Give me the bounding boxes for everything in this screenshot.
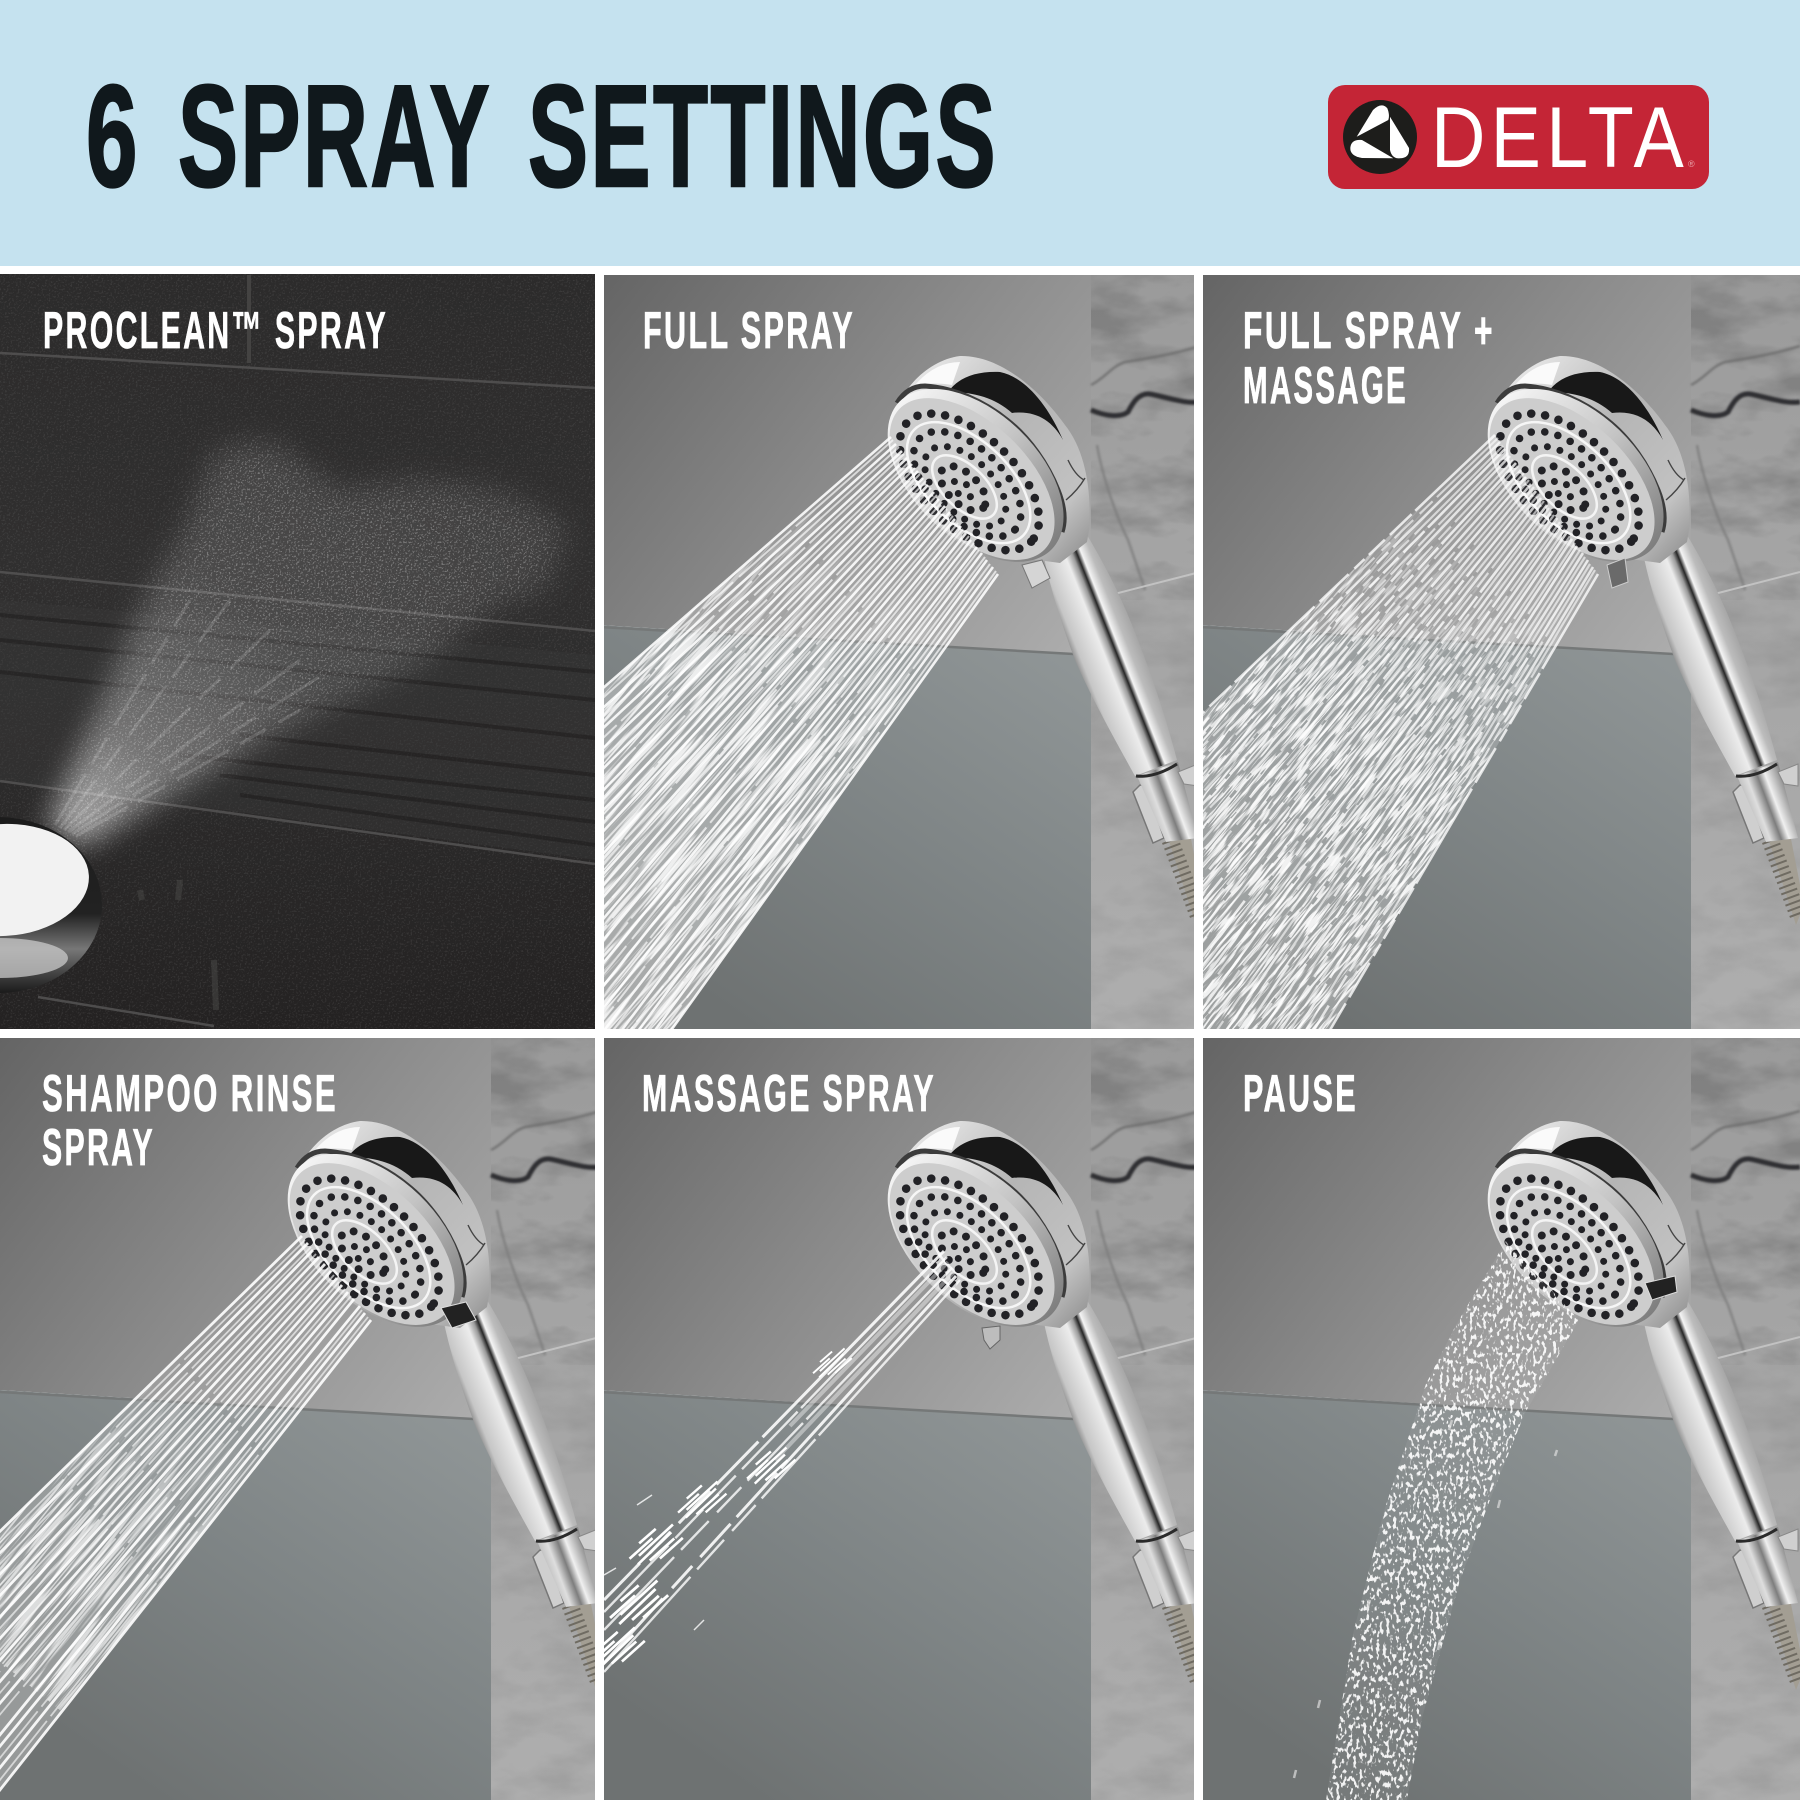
title: SPRAY	[178, 55, 492, 217]
water streams	[1203, 434, 1599, 1029]
panel: shampoo rinse spray	[0, 1035, 604, 1800]
wall background	[0, 1035, 600, 1800]
water streams	[604, 436, 999, 1029]
dark tile wall	[0, 274, 595, 1029]
label	[1244, 311, 1492, 404]
label: MASSAGE SPRAY	[642, 1065, 936, 1123]
panel: ProClean spray	[0, 274, 595, 1029]
logo: Delta	[1328, 85, 1709, 189]
label	[42, 1074, 335, 1166]
logo: Delta: DELTA	[1431, 90, 1689, 186]
hand shower	[1456, 1121, 1800, 1690]
panel: massage spray	[588, 1035, 1204, 1800]
label: FULL SPRAY	[643, 302, 855, 360]
wall background	[1200, 270, 1800, 1035]
header band	[0, 0, 1800, 266]
hand shower	[888, 1121, 1194, 1683]
label: PROCLEAN™ SPRAY	[43, 302, 388, 360]
title: 6	[86, 55, 140, 217]
water streams	[0, 1236, 371, 1800]
title: SETTINGS	[528, 55, 998, 217]
water jet	[588, 1251, 960, 1678]
hand shower	[888, 356, 1194, 918]
shower head nozzle	[0, 817, 102, 993]
hand shower	[1456, 356, 1800, 925]
panel: pause	[1200, 1035, 1800, 1800]
hand shower	[288, 1121, 595, 1686]
wall background	[600, 1035, 1200, 1800]
title	[86, 55, 998, 217]
wall background	[600, 270, 1200, 1035]
spray mist	[0, 430, 595, 860]
water droplets	[1294, 1230, 1600, 1800]
panel: full spray + massage	[1203, 275, 1800, 1029]
label: SHAMPOO RINSE	[42, 1065, 338, 1123]
label: PAUSE	[1243, 1065, 1358, 1123]
wall background	[1200, 1035, 1800, 1800]
label: SPRAY	[42, 1119, 155, 1177]
panel: full spray	[604, 275, 1194, 1029]
label: MASSAGE	[1243, 357, 1408, 415]
label: FULL SPRAY +	[1243, 302, 1495, 360]
logo: Delta: ®	[1688, 159, 1695, 169]
